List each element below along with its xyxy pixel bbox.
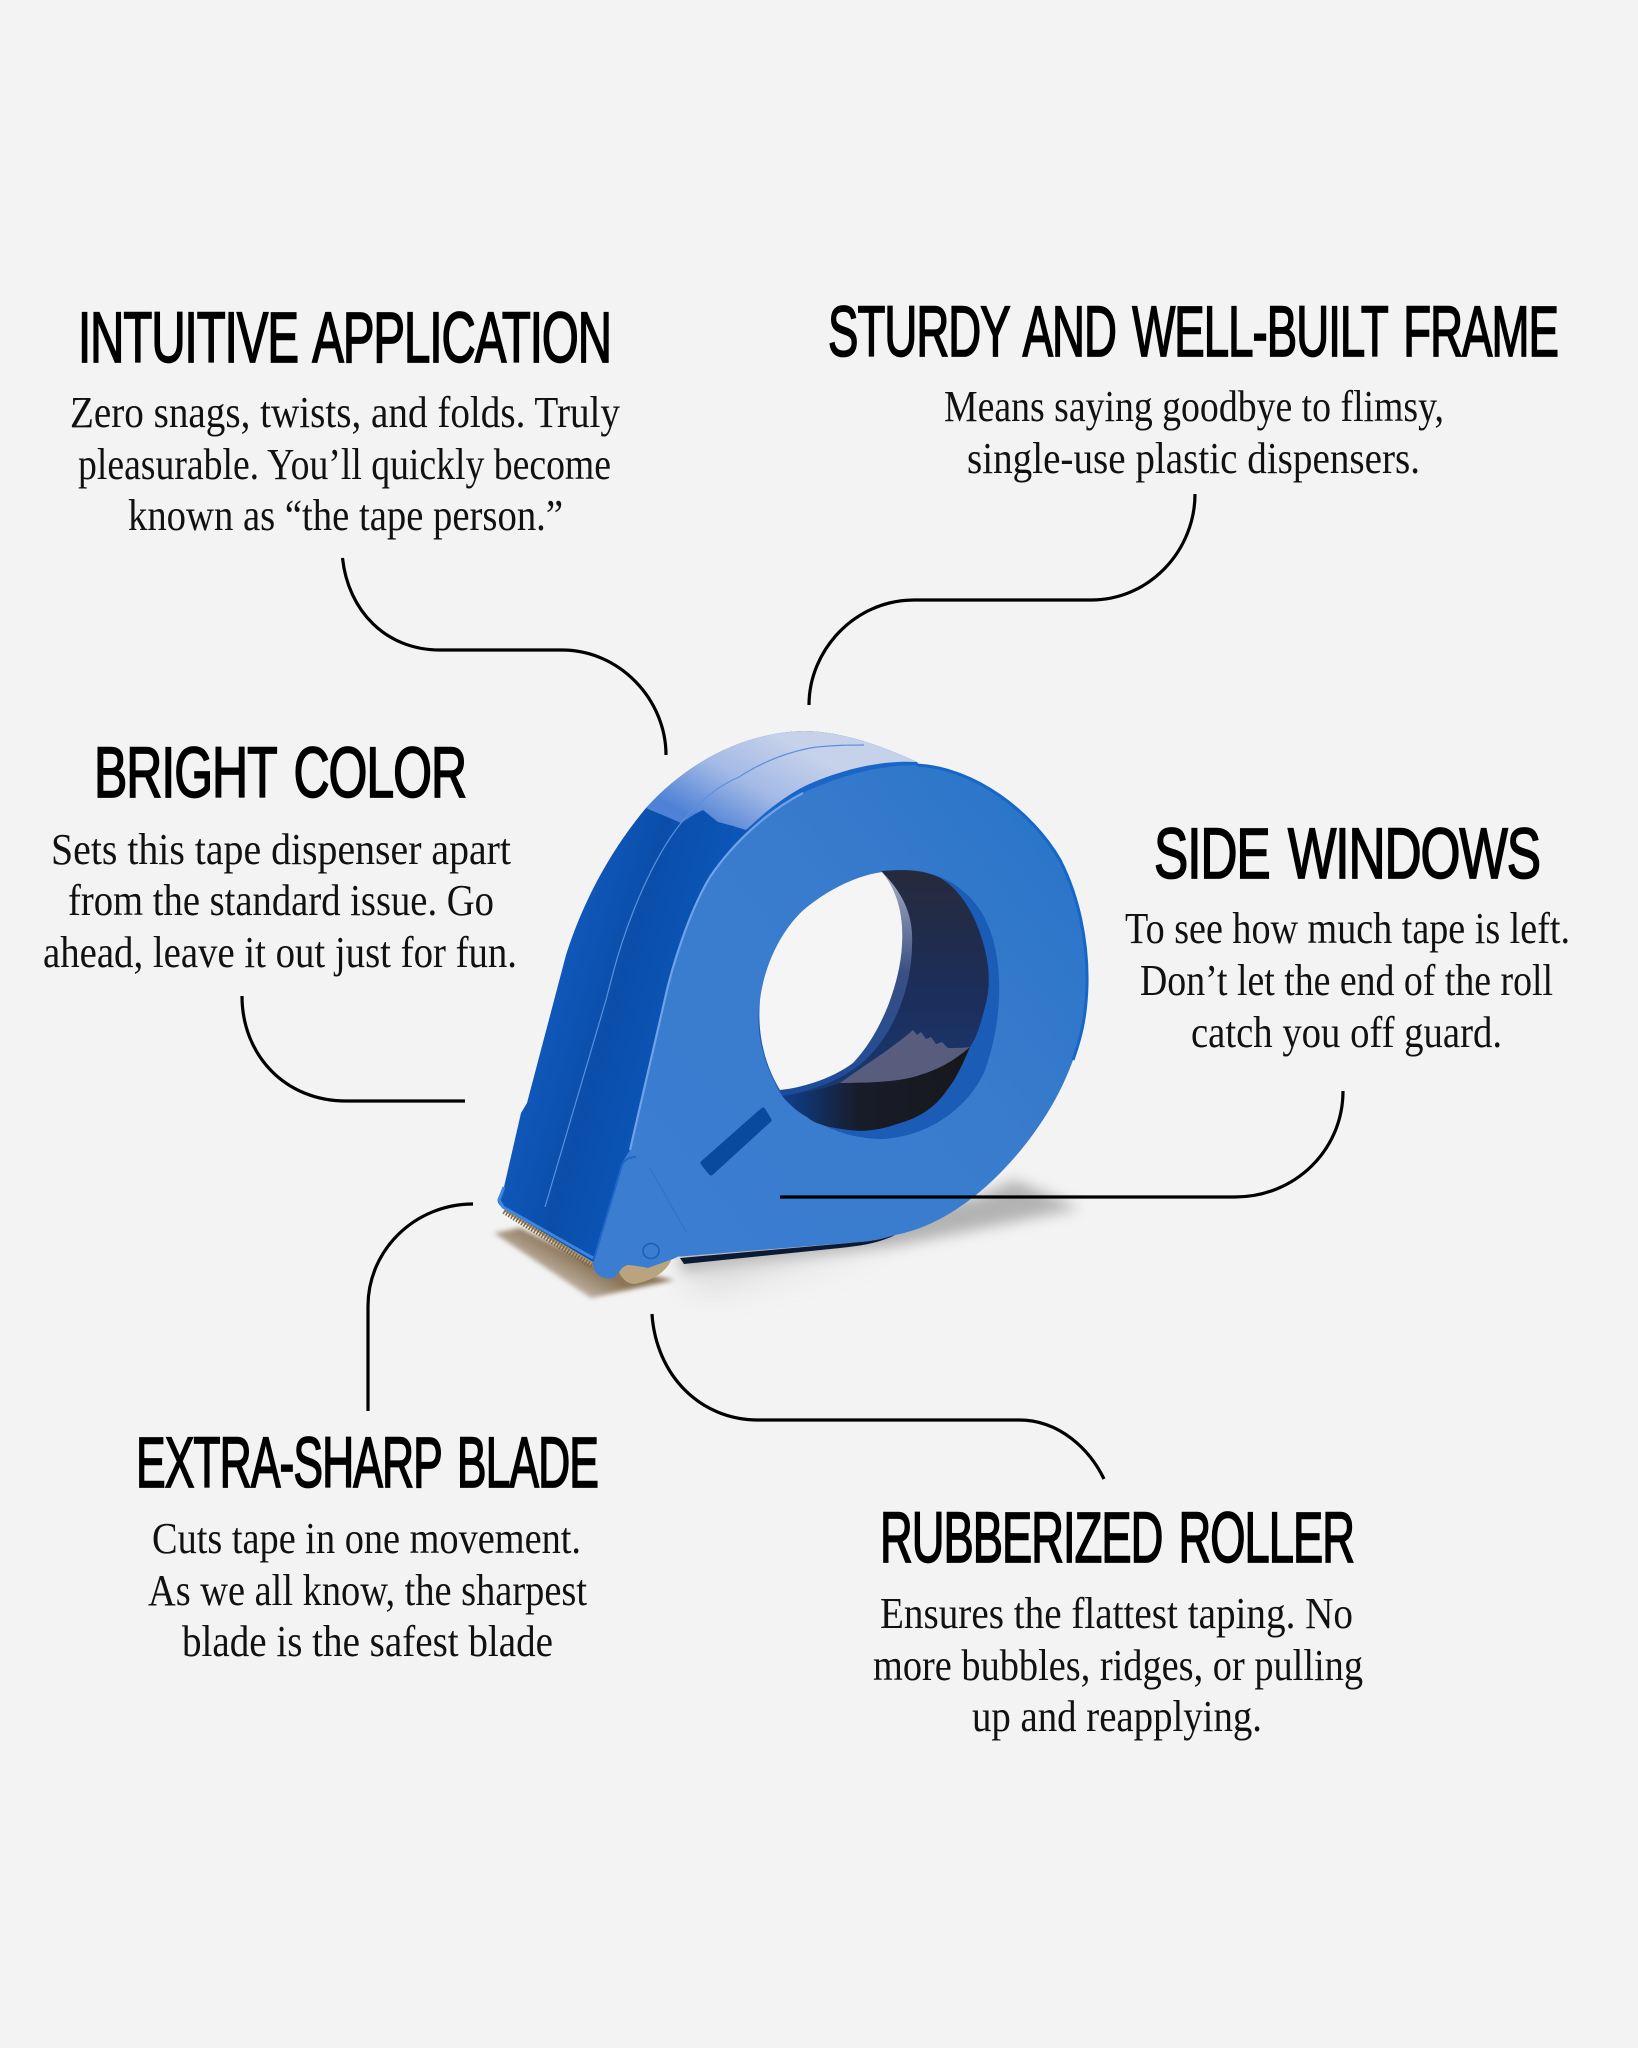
heading: EXTRA-SHARP BLADE <box>136 1424 598 1503</box>
panel: intuitive application <box>70 299 620 540</box>
interior floor black <box>783 1047 970 1131</box>
description: Ensures the flattest taping. No <box>880 1589 1353 1638</box>
window opening <box>758 870 999 1139</box>
blade teeth <box>504 1209 593 1266</box>
body seam <box>545 745 864 1207</box>
panel: bright color <box>43 734 517 977</box>
description: Cuts tape in one movement. <box>152 1514 581 1563</box>
dark underside wedge <box>680 1235 895 1264</box>
description: more bubbles, ridges, or pulling <box>873 1641 1363 1690</box>
tape slot <box>703 1110 769 1173</box>
heading: RUBBERIZED ROLLER <box>880 1499 1354 1578</box>
side gloss at base <box>499 1187 593 1258</box>
roller arm <box>593 1157 686 1278</box>
description: Sets this tape dispenser apart <box>51 825 511 874</box>
description <box>1125 904 1570 1057</box>
panel: extra-sharp blade <box>136 1424 598 1666</box>
dispenser side body <box>498 731 1000 1262</box>
description: Means saying goodbye to flimsy, <box>944 382 1444 431</box>
heading: BRIGHT COLOR <box>94 734 466 813</box>
interior wall <box>780 870 989 1131</box>
connector: sturdy frame <box>809 494 1195 705</box>
connector: side windows <box>780 1091 1343 1197</box>
description <box>873 1589 1363 1741</box>
description <box>148 1514 587 1666</box>
connector: bright color <box>242 996 465 1101</box>
description: As we all know, the sharpest <box>148 1566 587 1615</box>
description <box>944 382 1444 483</box>
back rim <box>780 872 912 1096</box>
product photo: blue tape dispenser <box>494 731 1087 1298</box>
panel: side windows <box>1125 815 1570 1057</box>
description: known as “the tape person.” <box>128 491 563 540</box>
panel: sturdy frame <box>828 293 1558 483</box>
front face <box>600 765 1087 1262</box>
description <box>43 825 517 977</box>
rubber roller <box>616 1258 672 1284</box>
description: To see how much tape is left. <box>1125 904 1570 953</box>
description: catch you off guard. <box>1191 1008 1502 1057</box>
front edge highlights <box>630 765 1087 1150</box>
description <box>70 388 620 540</box>
roller pin <box>643 1244 659 1258</box>
description: ahead, leave it out just for fun. <box>43 928 517 977</box>
description: up and reapplying. <box>972 1692 1262 1741</box>
window bevel <box>758 870 999 1139</box>
description: Don’t let the end of the roll <box>1140 956 1553 1005</box>
interior floor purple <box>840 1030 970 1083</box>
connector: extra-sharp blade <box>368 1204 473 1411</box>
description: Zero snags, twists, and folds. Truly <box>70 388 620 437</box>
glossy top highlight <box>646 731 917 830</box>
floor shadow under blade <box>494 1228 674 1298</box>
panel: rubberized roller <box>873 1499 1363 1741</box>
heading: INTUITIVE APPLICATION <box>78 299 611 378</box>
description: blade is the safest blade <box>182 1617 553 1666</box>
description: single-use plastic dispensers. <box>967 434 1420 483</box>
see-through opening <box>759 872 902 1090</box>
connector: intuitive application <box>342 558 666 755</box>
connector: rubberized roller <box>652 1314 1104 1479</box>
description: from the standard issue. Go <box>68 876 494 925</box>
floor shadow right <box>680 1180 1080 1290</box>
description: pleasurable. You’ll quickly become <box>78 440 611 489</box>
saturated band above front edge <box>746 762 917 830</box>
